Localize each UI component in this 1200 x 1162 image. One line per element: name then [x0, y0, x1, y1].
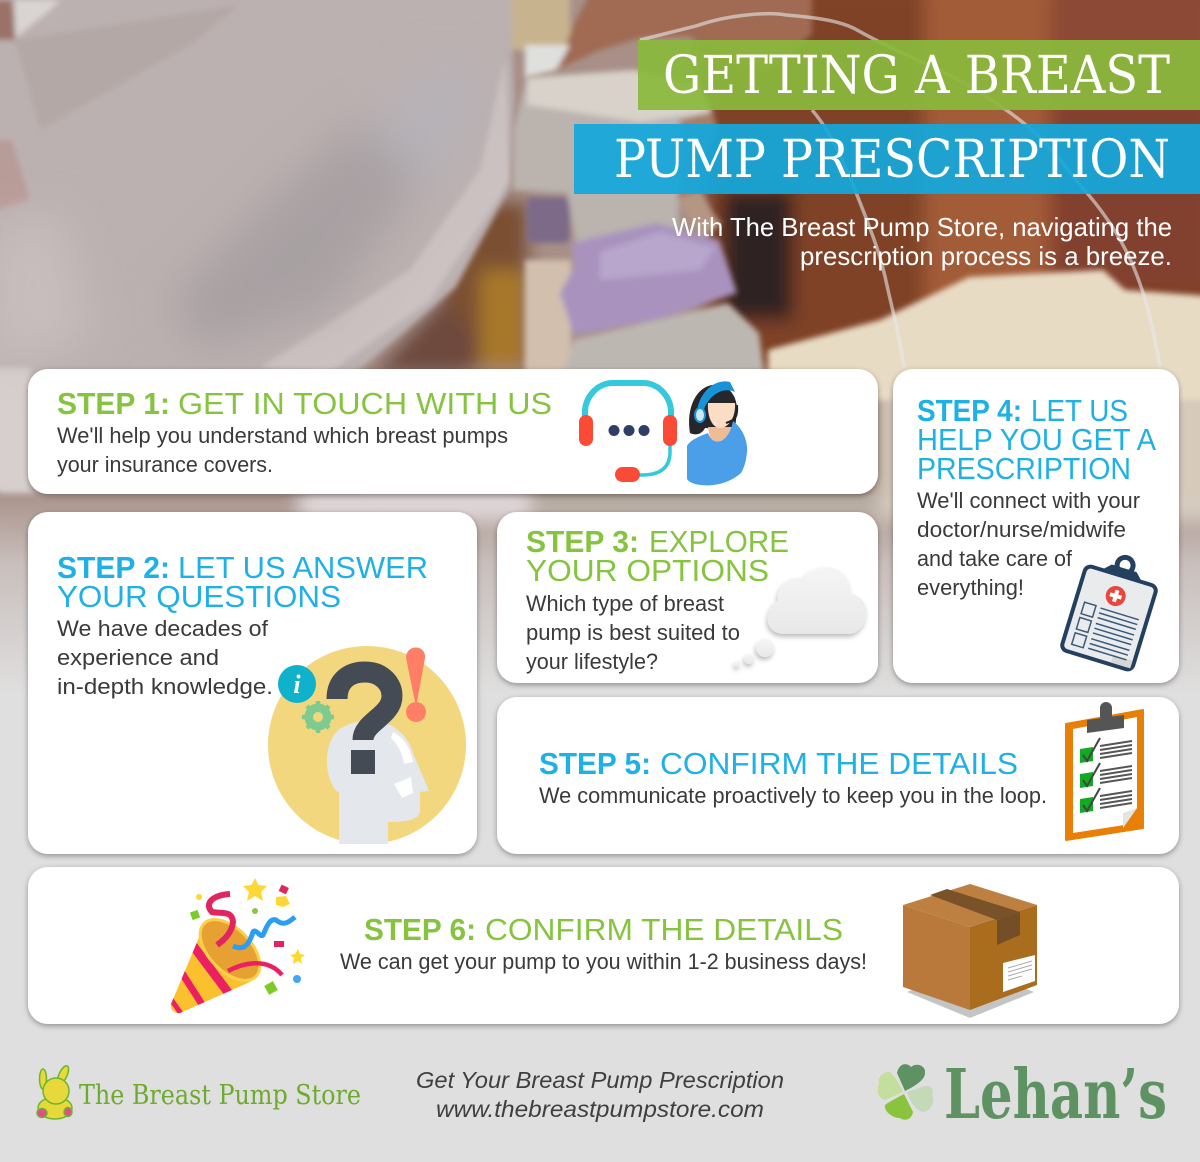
- step 1 text: your insurance covers.: [57, 452, 273, 477]
- step 6 heading: CONFIRM THE DETAILS: [485, 912, 843, 947]
- step 2 text: We have decades of: [57, 616, 269, 641]
- panel: step 2: [28, 512, 477, 854]
- footer call to action: Get Your Breast Pump Prescription: [416, 1067, 784, 1093]
- step 3 heading: [526, 524, 789, 588]
- floor fabric: [300, 488, 530, 520]
- title banner: getting a breast: GETTING A BREAST: [663, 46, 1170, 106]
- step 4 text: doctor/nurse/midwife: [917, 517, 1126, 542]
- logo bunny: [37, 1064, 72, 1119]
- step 2 text: in-depth knowledge.: [57, 674, 273, 699]
- step 2 text: [57, 616, 273, 699]
- step 1 text: [57, 423, 508, 477]
- panel: step 3: [497, 512, 878, 683]
- icon: party popper: [170, 878, 305, 1015]
- panel: step 4: [893, 369, 1179, 683]
- lavender cap: [560, 223, 737, 335]
- icon: medical clipboard: [1061, 547, 1163, 671]
- step 2 heading: LET US ANSWER: [178, 550, 428, 585]
- step 5 heading: STEP 5:: [539, 746, 651, 781]
- step 1 heading: GET IN TOUCH WITH US: [178, 386, 552, 421]
- logo: the breast pump store: [37, 1064, 361, 1119]
- backdrop wood: [700, 0, 1200, 380]
- step 5 heading: CONFIRM THE DETAILS: [660, 746, 1018, 781]
- step 3 text: Which type of breast: [526, 591, 724, 616]
- step 6 heading: STEP 6:: [364, 912, 476, 947]
- clover mark: [878, 1064, 933, 1120]
- pump funnel: [513, 70, 712, 243]
- step 5 text: We communicate proactively to keep you in the loop.: [539, 783, 1047, 808]
- second bottle: [527, 197, 570, 243]
- step 3 heading: STEP 3:: [526, 524, 639, 559]
- cushion: [768, 270, 1200, 400]
- step 2 heading: [57, 550, 428, 614]
- logo: lehan's: [878, 1055, 1167, 1135]
- icon: head with question mark: i: [293, 670, 301, 699]
- panel: step 6: [28, 867, 1179, 1024]
- icon: headset with dots: [579, 383, 677, 482]
- step 4 heading: LET US: [1031, 393, 1128, 428]
- icon: thought cloud: [734, 567, 866, 667]
- icon: checklist clipboard: [1066, 702, 1143, 840]
- step 6 box icon: [903, 884, 1037, 1018]
- step 2 heading: YOUR QUESTIONS: [57, 579, 341, 614]
- panel: step 1: [28, 369, 878, 494]
- panel: step 5: [497, 697, 1179, 854]
- top beige and hand: [505, 0, 570, 50]
- step 3 text: [526, 591, 740, 674]
- bottle: [562, 303, 765, 378]
- tubing: [640, 14, 1160, 367]
- step 4 heading: [917, 393, 1156, 486]
- fade to gray: [0, 495, 1200, 695]
- step 4 text: and take care of: [917, 546, 1073, 571]
- shirt shadow folds: [170, 120, 420, 350]
- step 2 text: experience and: [57, 645, 219, 670]
- footer call to action: www.thebreastpumpstore.com: [436, 1096, 764, 1122]
- subtitle: [672, 212, 1172, 271]
- step 4 text: [917, 488, 1140, 600]
- shirt: [0, 0, 514, 390]
- logo: the breast pump store: The Breast Pump Store: [79, 1080, 361, 1111]
- step 3 text: pump is best suited to: [526, 620, 740, 645]
- step 3 text: your lifestyle?: [526, 649, 658, 674]
- step 3 heading: EXPLORE: [649, 524, 789, 559]
- icon: support agent: [687, 381, 747, 485]
- footer call to action: [416, 1067, 784, 1122]
- subtitle: prescription process is a breeze.: [800, 241, 1172, 271]
- step 4 text: We'll connect with your: [917, 488, 1140, 513]
- step 4 heading: HELP YOU GET A: [917, 422, 1156, 457]
- step 1 text: We'll help you understand which breast pumps: [57, 423, 508, 448]
- step 1 heading: STEP 1:: [57, 386, 170, 421]
- step 2 heading: STEP 2:: [57, 550, 170, 585]
- icon: head with question mark: [268, 646, 466, 844]
- step 4 text: everything!: [917, 575, 1024, 600]
- step 3 heading: YOUR OPTIONS: [526, 553, 769, 588]
- step 4 heading: PRESCRIPTION: [917, 451, 1131, 486]
- subtitle: With The Breast Pump Store, navigating the: [672, 212, 1172, 242]
- step 6 text: We can get your pump to you within 1-2 business days!: [340, 949, 867, 974]
- step 4 heading: STEP 4:: [917, 393, 1022, 428]
